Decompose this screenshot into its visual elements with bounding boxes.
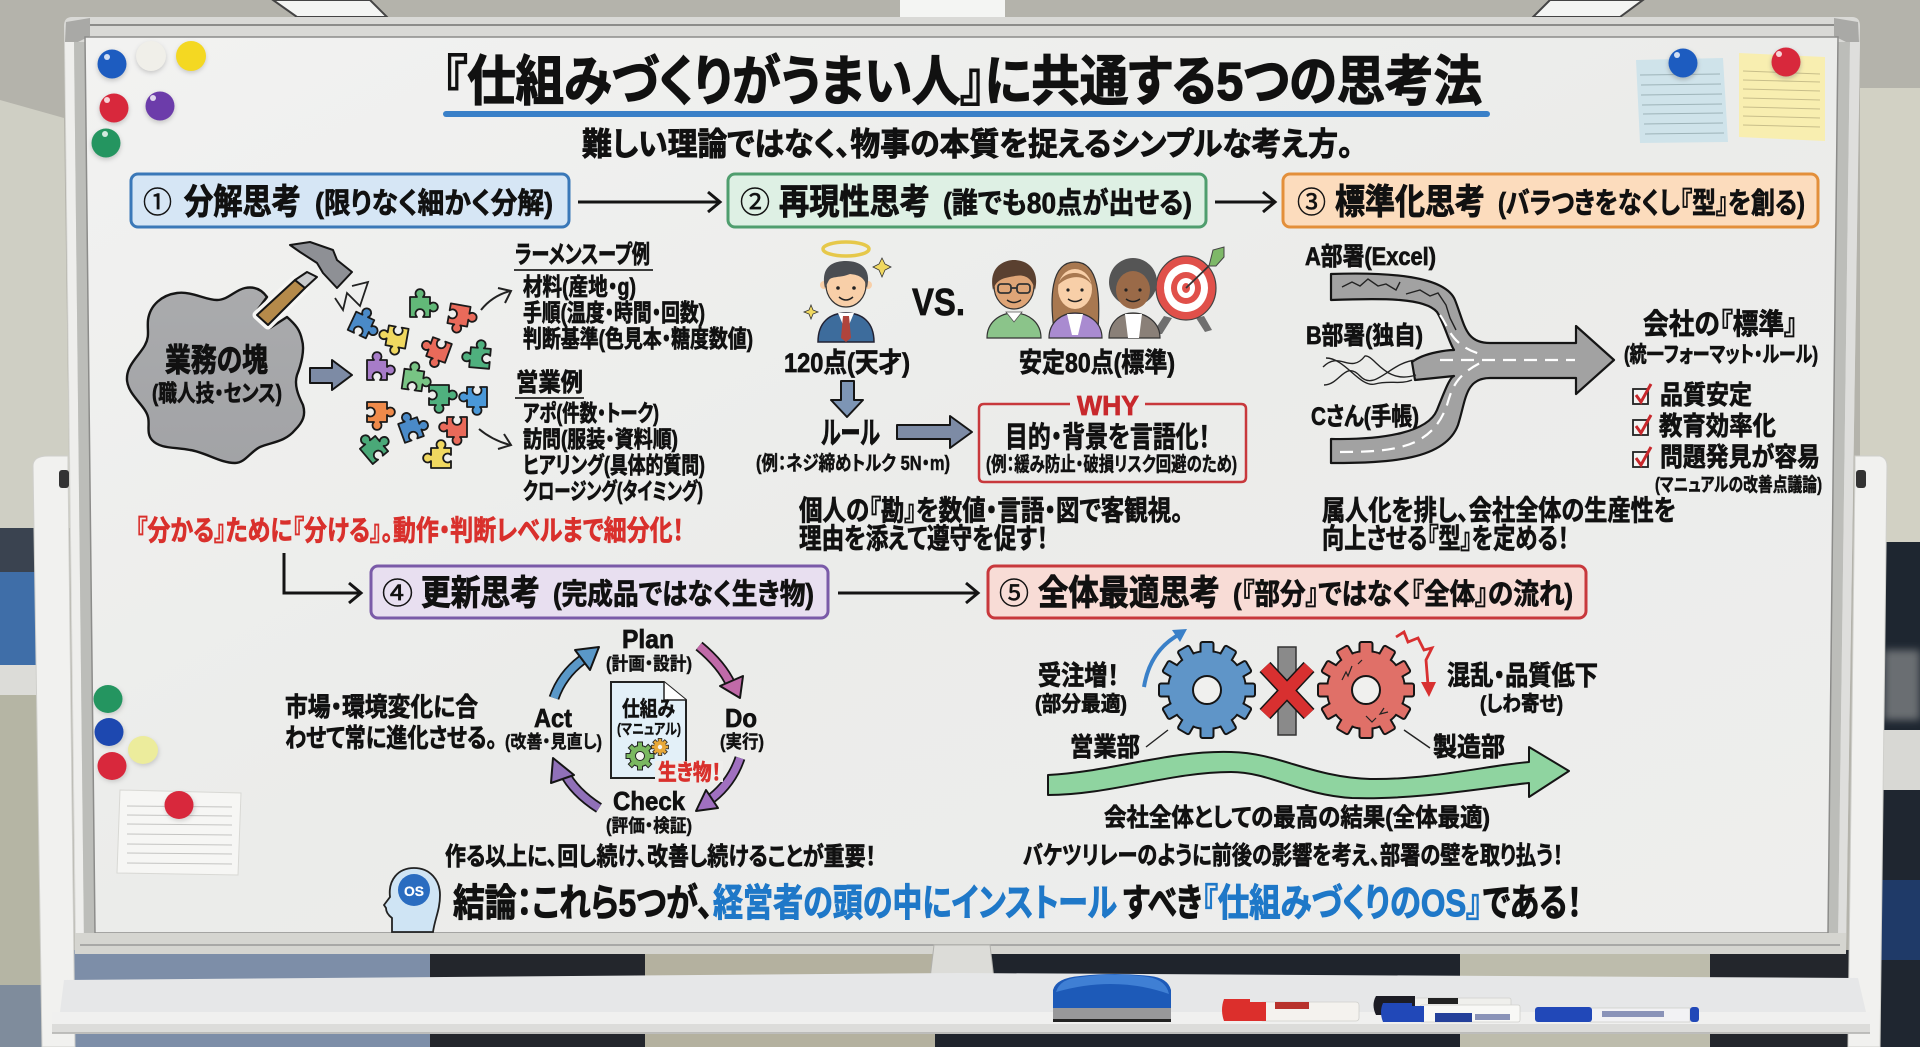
- icon: manual document: 生き物！: [658, 760, 721, 785]
- black marker: [1374, 996, 1511, 1016]
- blue marker: [1381, 1003, 1520, 1022]
- label 受注増: (部分最適): [1035, 693, 1127, 716]
- text block: 営業例: ヒアリング(具体的質問): [523, 452, 705, 478]
- callout: red summary: 『分かる』ために『分ける』。動作・判断レベルまで細分化！: [136, 515, 684, 546]
- icon: green gear: [626, 742, 654, 770]
- heading 4: 更新思考: 更新思考: [421, 574, 540, 613]
- check label 1: 品質安定: [1660, 380, 1752, 410]
- subtitle: 難しい理論ではなく、物事の本質を捉えるシンプルな考え方。: [582, 126, 1353, 162]
- panel: 再現性思考 illustration: [756, 242, 1246, 554]
- text block: left note: [285, 692, 497, 753]
- check label 2: 教育効率化: [1659, 411, 1776, 441]
- icon: hammer: [257, 242, 352, 325]
- label 製造部: [1404, 730, 1505, 762]
- icon: manual document: (マニュアル): [617, 721, 681, 738]
- label 営業部: 営業部: [1070, 732, 1140, 762]
- magnets top left: [91, 41, 206, 160]
- icon: head with OS brain: OS: [404, 883, 424, 899]
- label 120点: 120点(天才): [784, 348, 910, 378]
- text block: ラーメンスープ例: ラーメンスープ例: [515, 241, 650, 269]
- label Cさん: Cさん(手帳): [1311, 403, 1419, 431]
- VS label: VS.: [912, 282, 965, 324]
- text block: 再現性 summary: [799, 495, 1183, 554]
- blob sublabel: (職人技・センス): [152, 380, 282, 406]
- arrow Do to Check: [696, 758, 740, 811]
- text block: 再現性 summary: 個人の『勘』を数値・言語・図で客観視。: [799, 495, 1183, 526]
- text block: ラーメンスープ例: 材料(産地・g): [523, 274, 636, 301]
- arrow to puzzle pieces: [310, 360, 352, 390]
- label Check: Check: [613, 786, 685, 816]
- heading 5: 全体最適思考: ⑤: [999, 569, 1029, 613]
- rising blue arrow: [1144, 629, 1187, 687]
- heading 2: 再現性思考: (誰でも80点が出せる): [943, 186, 1192, 220]
- label B部署: B部署(独自): [1306, 322, 1423, 350]
- text block: left note: わせて常に進化させる。: [285, 723, 497, 753]
- text block: 標準化 summary: [1322, 495, 1676, 554]
- heading 3: 標準化思考: [1283, 174, 1818, 227]
- panel: 標準化思考 illustration: [1305, 243, 1822, 554]
- magnets and note lower left: [94, 685, 241, 875]
- check note: (マニュアルの改善点議論): [1655, 474, 1822, 496]
- icon: red gear: [1318, 642, 1414, 738]
- L-shaped arrow to 4: [284, 553, 361, 603]
- icon: target: [1152, 247, 1224, 334]
- callout: WHY box: 目的・背景を言語化！: [1005, 421, 1210, 454]
- label Plan: Plan: [622, 624, 674, 654]
- icon: checkbox 3: [1633, 447, 1651, 467]
- title underline: [443, 111, 1490, 117]
- sublabel unified format: (統一フォーマット・ルール): [1624, 342, 1818, 367]
- icon: genius person: [804, 242, 891, 342]
- text block: 営業例: [515, 369, 705, 504]
- icon: puzzle pieces: [348, 289, 492, 468]
- check label 3: 問題発見が容易: [1660, 442, 1820, 472]
- icon: red X: [1265, 667, 1309, 714]
- conclusion: 結論：これら5つが、: [453, 883, 713, 925]
- heading 2: 再現性思考: 再現性思考: [779, 183, 930, 222]
- arrow down to rule: [831, 381, 863, 417]
- callout: WHY box: [979, 390, 1246, 482]
- rule example: (例：ネジ締めトルク 5N・m): [756, 452, 950, 475]
- arrow to WHY: [897, 416, 972, 448]
- arrow 2 to 3: [1215, 192, 1275, 212]
- text block: 営業例: 訪問(服装・資料順): [523, 426, 678, 452]
- panel: 全体最適思考 illustration: [1023, 629, 1598, 870]
- text block: ラーメンスープ例: 判断基準(色見本・糖度数値): [523, 326, 753, 353]
- heading 3: 標準化思考: ③: [1297, 178, 1326, 222]
- text block: 営業例: クロージング(タイミング): [523, 478, 703, 504]
- label 受注増: [1035, 661, 1127, 716]
- callout: WHY box: WHY: [1077, 390, 1139, 421]
- label A部署: A部署(Excel): [1305, 243, 1436, 271]
- heading 3: 標準化思考: (バラつきをなくし『型』を創る): [1498, 187, 1805, 220]
- text block: 営業例: アポ(件数・トーク): [523, 400, 659, 426]
- conclusion: 経営者の頭の中にインストール: [713, 883, 1117, 925]
- label Plan: [606, 624, 692, 674]
- conclusion: 『仕組みづくりのOS』: [1202, 883, 1482, 925]
- text block: cycle note: 作る以上に、回し続け、改善し続けることが重要！: [445, 842, 876, 871]
- text block: ラーメンスープ例: [514, 241, 753, 353]
- label 混乱: 混乱・品質低下: [1447, 661, 1598, 691]
- label Check: (評価・検証): [606, 816, 692, 836]
- icon: manual document: 仕組み: [622, 698, 675, 721]
- heading 2: 再現性思考: [728, 174, 1206, 227]
- icon: impact spark: [335, 282, 368, 310]
- label Act: [505, 703, 602, 752]
- eraser: [1053, 974, 1171, 1022]
- conclusion: [453, 883, 1582, 925]
- heading 4: 更新思考: (完成品ではなく生き物): [553, 578, 814, 611]
- icon: dark-haired person: [1109, 258, 1160, 338]
- label Act: Act: [534, 703, 572, 733]
- heading 4: 更新思考: ④: [382, 569, 413, 613]
- panel: 分解思考 illustration: [127, 242, 511, 468]
- icon: red zigzag arrow: [1396, 632, 1436, 697]
- icon: orange gear: [652, 738, 668, 756]
- label Do: Do: [725, 703, 757, 733]
- icon: checkbox 1: [1633, 384, 1651, 404]
- curved arrow down: [479, 429, 511, 449]
- easel legs: [33, 456, 1887, 1047]
- arrow 4 to 5: [838, 583, 978, 603]
- ceiling lights: [273, 0, 1643, 17]
- arrow 1 to 2: [578, 192, 720, 212]
- text block: 標準化 summary: 属人化を排し、会社全体の生産性を: [1322, 495, 1676, 526]
- rule label: ルール: [821, 416, 880, 451]
- heading 1: 分解思考: [131, 174, 569, 227]
- label 混乱: [1447, 661, 1598, 716]
- heading 2: 再現性思考: ②: [740, 178, 770, 222]
- heading 1: 分解思考: ①: [143, 178, 172, 222]
- heading 5: 全体最適思考: 全体最適思考: [1038, 574, 1220, 613]
- label Plan: (計画・設計): [606, 654, 692, 674]
- heading 5: 全体最適思考: [988, 566, 1586, 618]
- wall: [1278, 647, 1296, 735]
- heading 5: 全体最適思考: (『部分』ではなく『全体』の流れ): [1233, 578, 1573, 611]
- callout: WHY box: (例：緩み防止・破損リスク回避のため): [986, 453, 1237, 476]
- label overall result: 会社全体としての最高の結果(全体最適): [1104, 804, 1490, 832]
- text block: bucket relay note: バケツリレーのように前後の影響を考え、部署の壁を取り払う！: [1023, 842, 1563, 870]
- label Do: [720, 703, 764, 752]
- conclusion: である！: [1483, 883, 1582, 925]
- arrow Act to Plan: [554, 647, 599, 698]
- label 混乱: (しわ寄せ): [1480, 693, 1563, 716]
- long blue marker: [1535, 1007, 1699, 1022]
- label Do: (実行): [720, 732, 764, 752]
- merging road arrow: [1323, 274, 1614, 463]
- text block: ラーメンスープ例: 手順(温度・時間・回数): [523, 300, 705, 327]
- text block: left note: 市場・環境変化に合: [285, 692, 478, 722]
- icon: woman in purple: [1049, 262, 1102, 338]
- text block: 営業例: 営業例: [516, 369, 583, 397]
- icon: manual document: [611, 682, 723, 785]
- icon: work blob: [127, 287, 304, 463]
- heading 3: 標準化思考: 標準化思考: [1335, 183, 1485, 222]
- icon: checkbox 2: [1633, 415, 1651, 435]
- conclusion: すべき: [1123, 883, 1202, 925]
- label 安定80点: 安定80点(標準): [1019, 348, 1175, 378]
- red marker: [1222, 999, 1359, 1021]
- panel: 更新思考 PDCA cycle: [285, 624, 876, 871]
- heading 1: 分解思考: 分解思考: [184, 183, 301, 222]
- heading 4: 更新思考: [371, 566, 828, 618]
- label Act: (改善・見直し): [505, 732, 602, 752]
- curved arrow up: [481, 288, 511, 310]
- arrow Check to Act: [551, 758, 599, 808]
- board surface: [85, 37, 1838, 933]
- icon: person with glasses: [987, 260, 1041, 338]
- label 製造部: 製造部: [1433, 732, 1505, 762]
- heading 1: 分解思考: (限りなく細かく分解): [315, 187, 553, 220]
- sticky notes top right: [1636, 48, 1825, 143]
- text block: 再現性 summary: 理由を添えて遵守を促す！: [799, 523, 1048, 554]
- green flow arrow: [1048, 747, 1569, 798]
- text block: 標準化 summary: 向上させる『型』を定める！: [1322, 523, 1569, 554]
- bottom rail and marker tray: [52, 933, 1870, 1034]
- icon: head with OS brain: [384, 868, 440, 932]
- label Check: [606, 786, 692, 836]
- label 会社の標準: 会社の『標準』: [1643, 308, 1797, 341]
- title: 『仕組みづくりがうまい人』に共通する5つの思考法: [443, 52, 1482, 112]
- label 受注増: 受注増！: [1038, 661, 1119, 691]
- icon: blue gear: [1159, 642, 1255, 738]
- arrow Plan to Do: [699, 646, 743, 698]
- blob label: 業務の塊: [165, 342, 268, 378]
